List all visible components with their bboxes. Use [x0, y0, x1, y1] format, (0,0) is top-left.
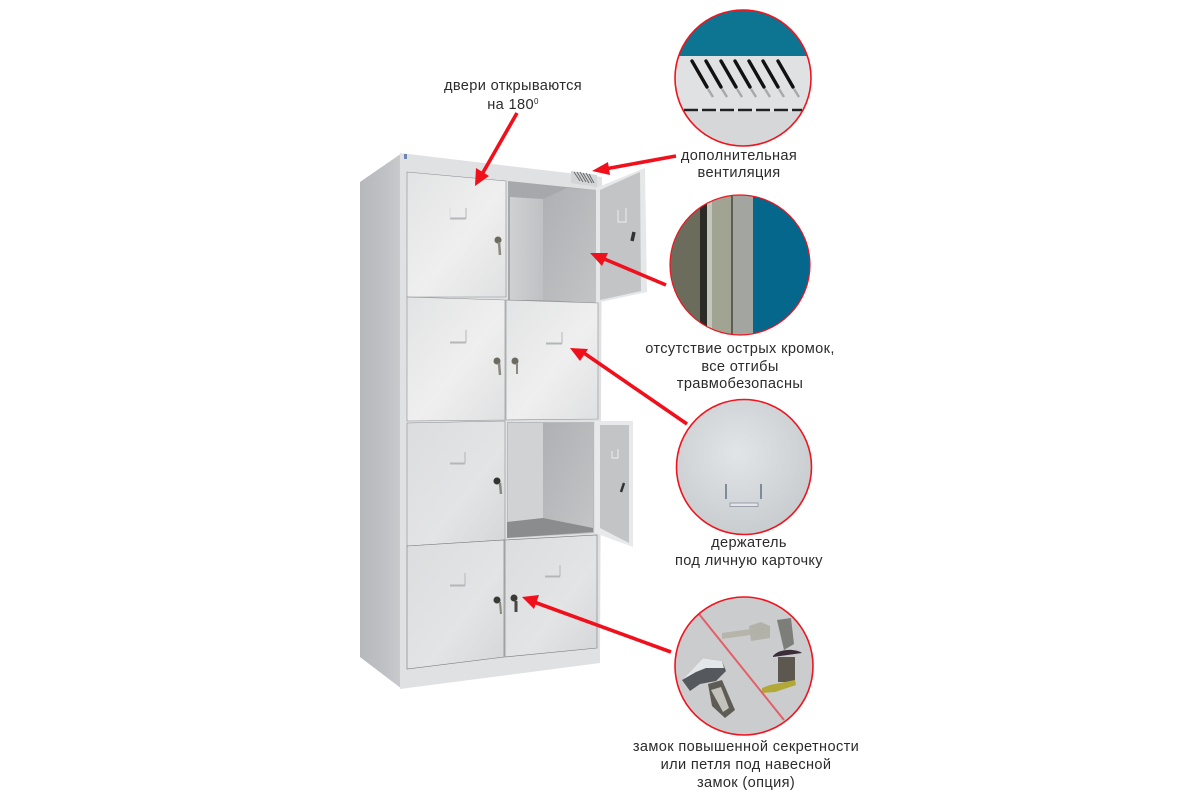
label: lock options: замок повышенной секретности: [633, 739, 859, 755]
open compartment row 3: [507, 422, 594, 538]
top vent grille: [571, 171, 597, 187]
locker cabinet: [360, 153, 647, 689]
detail circle: lock options: [674, 596, 814, 736]
door row 4 left: [407, 540, 504, 669]
detail circle: card holder: [676, 400, 812, 534]
label: safe edges: отсутствие острых кромок,: [645, 341, 835, 357]
lock handle: [682, 658, 735, 718]
label: ventilation: дополнительная: [681, 148, 797, 164]
door row 4 right: [505, 535, 597, 657]
arrow: lock: [522, 595, 671, 652]
label: lock options: или петля под навесной: [661, 757, 831, 773]
label: doors open 180: на 180: [487, 97, 534, 113]
detail circle: safe edges: [670, 195, 813, 335]
label: card holder: под личную карточку: [675, 553, 823, 569]
label: doors open 180: 0: [534, 97, 539, 106]
open door row 3: [595, 421, 633, 547]
arrow: card holder: [570, 348, 687, 424]
maker logo: [404, 154, 407, 159]
label: ventilation: вентиляция: [698, 165, 780, 181]
door row 3 left: [407, 421, 505, 546]
door row 2 left: [407, 297, 505, 421]
door row 2 right: [506, 300, 598, 420]
label: safe edges: все отгибы: [701, 359, 779, 375]
label: doors open 180: двери открываются: [444, 78, 582, 94]
detail circle: ventilation: [675, 10, 811, 146]
cabinet front frame: [400, 153, 602, 689]
key and cylinder lock: [722, 618, 802, 693]
open door row 1: [596, 168, 647, 303]
diagonal divider: [699, 614, 784, 720]
arrow: ventilation: [592, 156, 676, 175]
arrow: doors: [475, 113, 517, 186]
door row 1 left: [407, 172, 506, 297]
arrow: edges: [590, 253, 666, 285]
label: card holder: держатель: [711, 535, 787, 551]
cabinet side panel: [360, 153, 402, 689]
label: lock options: замок (опция): [697, 775, 795, 791]
label: safe edges: травмобезопасны: [677, 376, 803, 392]
open compartment row 1: [508, 181, 596, 303]
